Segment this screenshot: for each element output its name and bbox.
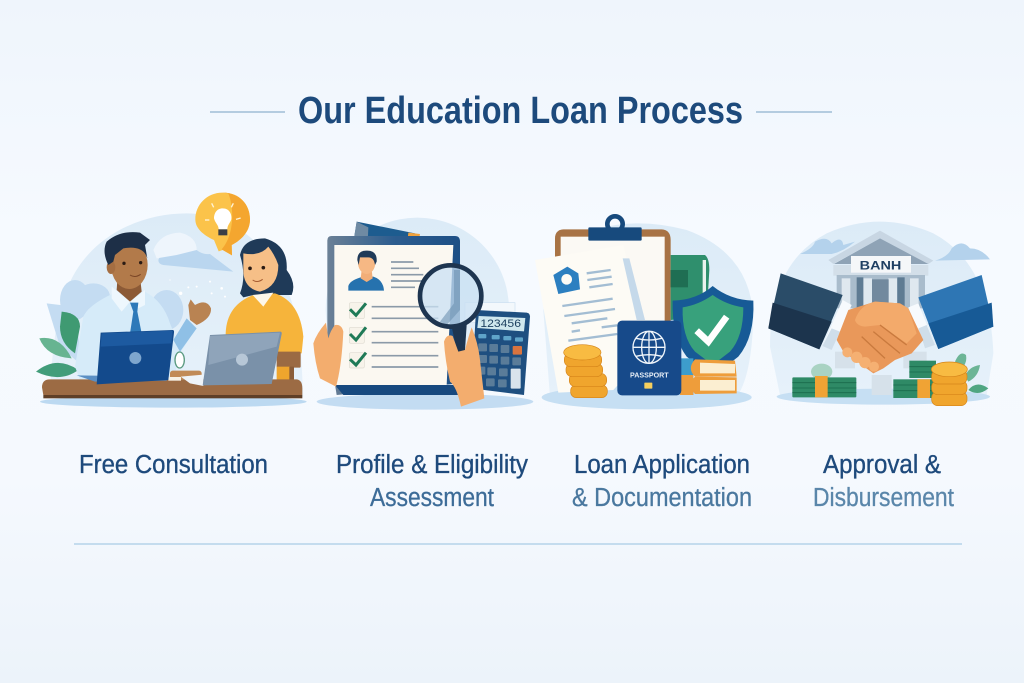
icon: calculator: 123456 xyxy=(480,318,521,330)
panel: approval and disbursement illustration xyxy=(768,222,993,406)
label: free consultation: Free Consultation xyxy=(79,451,268,479)
icon: leaves xyxy=(811,353,988,393)
label: approval and disbursement: Approval & xyxy=(823,451,941,479)
icon: cash stack right xyxy=(893,361,936,398)
icon: handshake xyxy=(837,302,923,373)
icon: woman xyxy=(226,238,303,380)
text lines xyxy=(372,262,438,367)
icon: bank building xyxy=(828,231,933,395)
icon: bank building: BANH xyxy=(860,259,901,273)
icon: left hand xyxy=(313,323,343,387)
icon: calculator xyxy=(472,310,530,395)
icon: green book xyxy=(671,255,709,320)
label: loan application and documentation: & Documentation xyxy=(572,484,752,512)
icon: coin stack xyxy=(564,345,607,398)
label: loan application and documentation xyxy=(572,451,752,512)
icon: desk items xyxy=(168,352,202,381)
label: profile and eligibility assessment: Profile & Eligibility xyxy=(336,451,528,479)
icon: man xyxy=(75,232,211,380)
icon: cash stack left xyxy=(792,376,856,397)
panel: free consultation illustration xyxy=(36,193,307,408)
icon: pale foliage xyxy=(47,280,183,367)
label: approval and disbursement: Disbursement xyxy=(813,484,954,512)
icon: right sleeve xyxy=(908,275,993,349)
panel: loan application illustration xyxy=(535,216,753,409)
icon: blue laptop xyxy=(77,330,174,384)
icon: leaves xyxy=(36,312,80,377)
label: loan application and documentation: Loan Application xyxy=(574,451,750,479)
icon: clipboard xyxy=(555,216,671,337)
icon: document xyxy=(535,245,648,393)
icon: paper behind xyxy=(465,303,515,323)
icon: desk xyxy=(42,379,302,398)
icon: clipboard xyxy=(327,236,460,395)
icon: speech bubble with light bulb xyxy=(195,193,250,255)
label: approval and disbursement xyxy=(813,451,954,512)
label: profile and eligibility assessment: Assessment xyxy=(370,484,494,512)
title: Our Education Loan Process xyxy=(298,90,743,132)
icon: clouds xyxy=(800,239,990,261)
icon: sparkles xyxy=(169,279,226,298)
panel: profile assessment illustration xyxy=(313,218,533,410)
icon: coin stack xyxy=(931,362,967,406)
icon: passport: PASSPORT xyxy=(630,371,669,380)
icon: folder tab pen xyxy=(353,222,424,244)
icon: profile avatar xyxy=(348,251,384,291)
icon: magnifying glass xyxy=(420,265,481,352)
icon: left sleeve xyxy=(768,273,852,350)
icon: grey laptop xyxy=(181,332,282,386)
icon: check marks xyxy=(349,303,366,368)
icon: cloud xyxy=(158,246,233,272)
icon: passport xyxy=(617,321,681,395)
label: profile and eligibility assessment xyxy=(336,451,528,512)
icon: stacked books xyxy=(680,358,737,395)
icon: right hand xyxy=(444,327,484,407)
icon: shield xyxy=(673,286,753,377)
